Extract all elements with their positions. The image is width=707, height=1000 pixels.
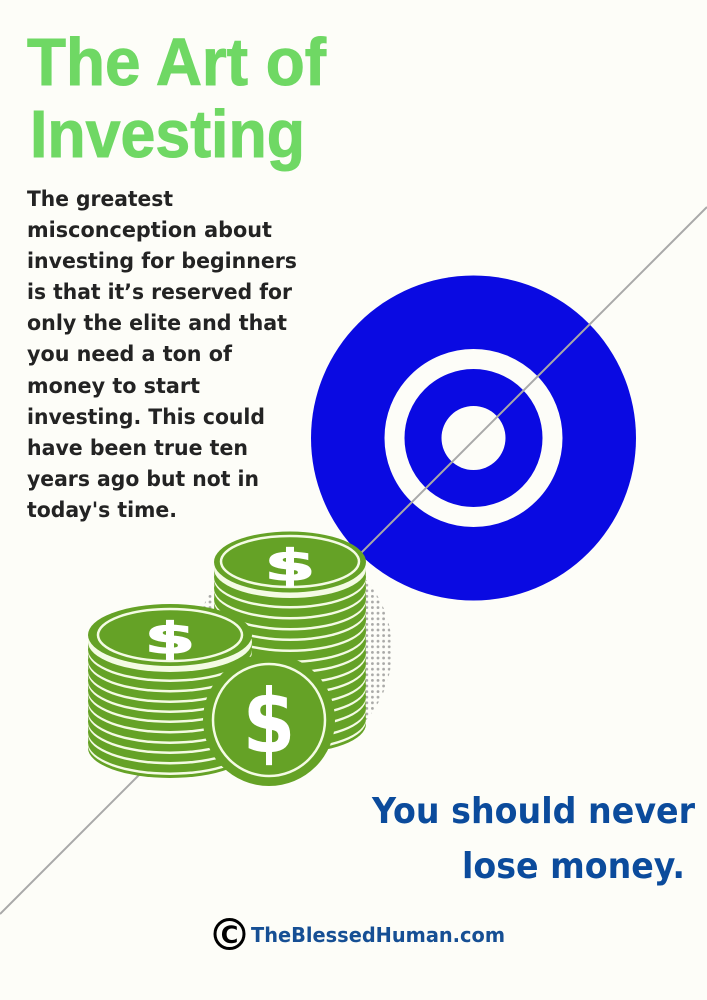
intro paragraph: years ago but not in	[27, 467, 259, 492]
website name: TheBlessedHuman.com	[251, 923, 505, 947]
intro paragraph: have been true ten	[27, 436, 248, 461]
intro paragraph: only the elite and that	[27, 311, 287, 336]
icon: copyright: C	[221, 921, 238, 949]
coin stack: left	[88, 604, 252, 778]
intro paragraph: today's time.	[27, 498, 177, 523]
intro paragraph: money to start	[27, 374, 200, 399]
front coin: $	[243, 672, 295, 773]
coin stack: left: $	[145, 614, 195, 664]
title: The Art of	[27, 25, 327, 100]
intro paragraph: investing. This could	[27, 405, 265, 430]
intro paragraph: misconception about	[27, 218, 272, 243]
target graphic	[311, 276, 636, 600]
diagonal line	[0, 207, 707, 914]
intro paragraph: investing for beginners	[27, 249, 297, 274]
footer credit	[215, 920, 505, 949]
coin illustration	[88, 532, 366, 786]
coin stack: right	[214, 532, 366, 753]
icon: copyright	[215, 920, 244, 949]
coin stack: right: $	[265, 541, 315, 591]
halftone dot circle	[194, 546, 392, 754]
closing statement	[371, 791, 695, 887]
closing statement: lose money.	[462, 846, 685, 887]
title: Investing	[30, 97, 305, 172]
intro paragraph	[27, 187, 297, 523]
intro paragraph: is that it’s reserved for	[27, 280, 292, 305]
title	[27, 25, 327, 172]
intro paragraph: The greatest	[27, 187, 173, 212]
front coin	[203, 654, 335, 786]
intro paragraph: you need a ton of	[27, 342, 233, 367]
